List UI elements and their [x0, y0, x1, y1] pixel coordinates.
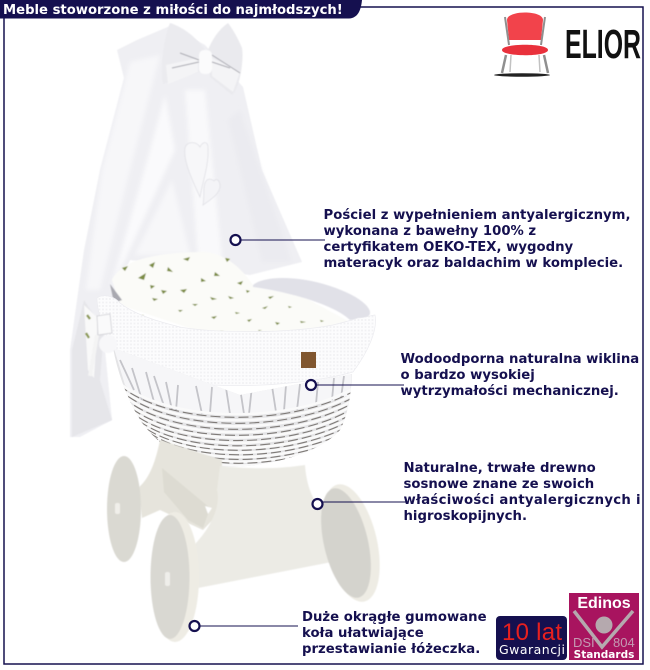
- logo: Elior: [494, 12, 641, 77]
- badge label: Gwarancji: [499, 642, 565, 657]
- callout text: wykonana z bawełny 100% z: [324, 224, 536, 239]
- marker: [312, 499, 406, 509]
- callout text: sosnowe znane ze swoich: [404, 477, 594, 492]
- callout text: o bardzo wysokiej: [400, 368, 535, 383]
- wheel: right: [312, 479, 390, 607]
- badge footer: Standards: [574, 649, 634, 661]
- callout text: Duże okrągłe gumowane: [302, 610, 487, 625]
- front support: [192, 465, 342, 588]
- wooden base: [138, 440, 342, 588]
- icon: hearts: [185, 143, 220, 205]
- right rim roll: [253, 278, 370, 320]
- inner lining: [113, 345, 352, 414]
- wheel: front left: [150, 512, 199, 642]
- callout text: [324, 207, 631, 271]
- banner title: Meble stoworzone z miłości do najmłodszych!: [3, 2, 343, 18]
- callout text: higroskopijnych.: [404, 509, 527, 524]
- callout: wicker: [306, 352, 639, 399]
- badge title: Edinos: [577, 595, 631, 612]
- callout text: [404, 461, 640, 524]
- callout text: Naturalne, trwałe drewno: [404, 461, 596, 476]
- canopy veil: [70, 26, 302, 437]
- badge: 10 lat warranty: [496, 616, 567, 660]
- leather tag: [301, 352, 316, 368]
- weave strands: [118, 382, 354, 466]
- rear support: [138, 440, 222, 530]
- callout text: [302, 610, 487, 657]
- callout text: certyfikatem OEKO-TEX, wygodny: [324, 240, 574, 255]
- badge code: DSI: [573, 635, 595, 650]
- wicker basket: [114, 349, 352, 467]
- cradle photo: [70, 23, 390, 642]
- badge emblem: [574, 611, 633, 647]
- callout text: właściwości antyalergicznych i: [404, 492, 640, 508]
- bedding: [110, 252, 350, 345]
- callout: bedding: [230, 207, 631, 271]
- marker: [230, 235, 325, 245]
- canopy tie: [84, 305, 117, 378]
- icon: bow: [162, 23, 243, 95]
- inner brace: [162, 468, 210, 528]
- callout text: przestawianie łóżeczka.: [302, 641, 480, 657]
- wheel: rear left: [107, 456, 141, 562]
- leaf print: [122, 257, 324, 337]
- marker: [190, 621, 298, 631]
- badge number: 10 lat: [502, 619, 562, 646]
- badge: Edinos standards: [569, 593, 639, 661]
- callout: wood: [312, 461, 640, 524]
- waffle band: [97, 296, 376, 386]
- callout text: koła ułatwiające: [302, 626, 424, 641]
- callout text: [400, 352, 639, 399]
- badge: Edinos standards: 804: [613, 635, 635, 650]
- callout text: Wodoodporna naturalna wiklina: [400, 352, 639, 367]
- marker: [306, 380, 404, 390]
- callout text: wytrzymałości mechanicznej.: [400, 383, 619, 399]
- callout text: materacyk oraz baldachim w komplecie.: [324, 256, 623, 271]
- callout text: Pościel z wypełnieniem antyalergicznym,: [324, 207, 631, 223]
- icon: red chair: [494, 12, 550, 77]
- callout: wheels: [190, 610, 487, 657]
- header banner: [0, 0, 362, 18]
